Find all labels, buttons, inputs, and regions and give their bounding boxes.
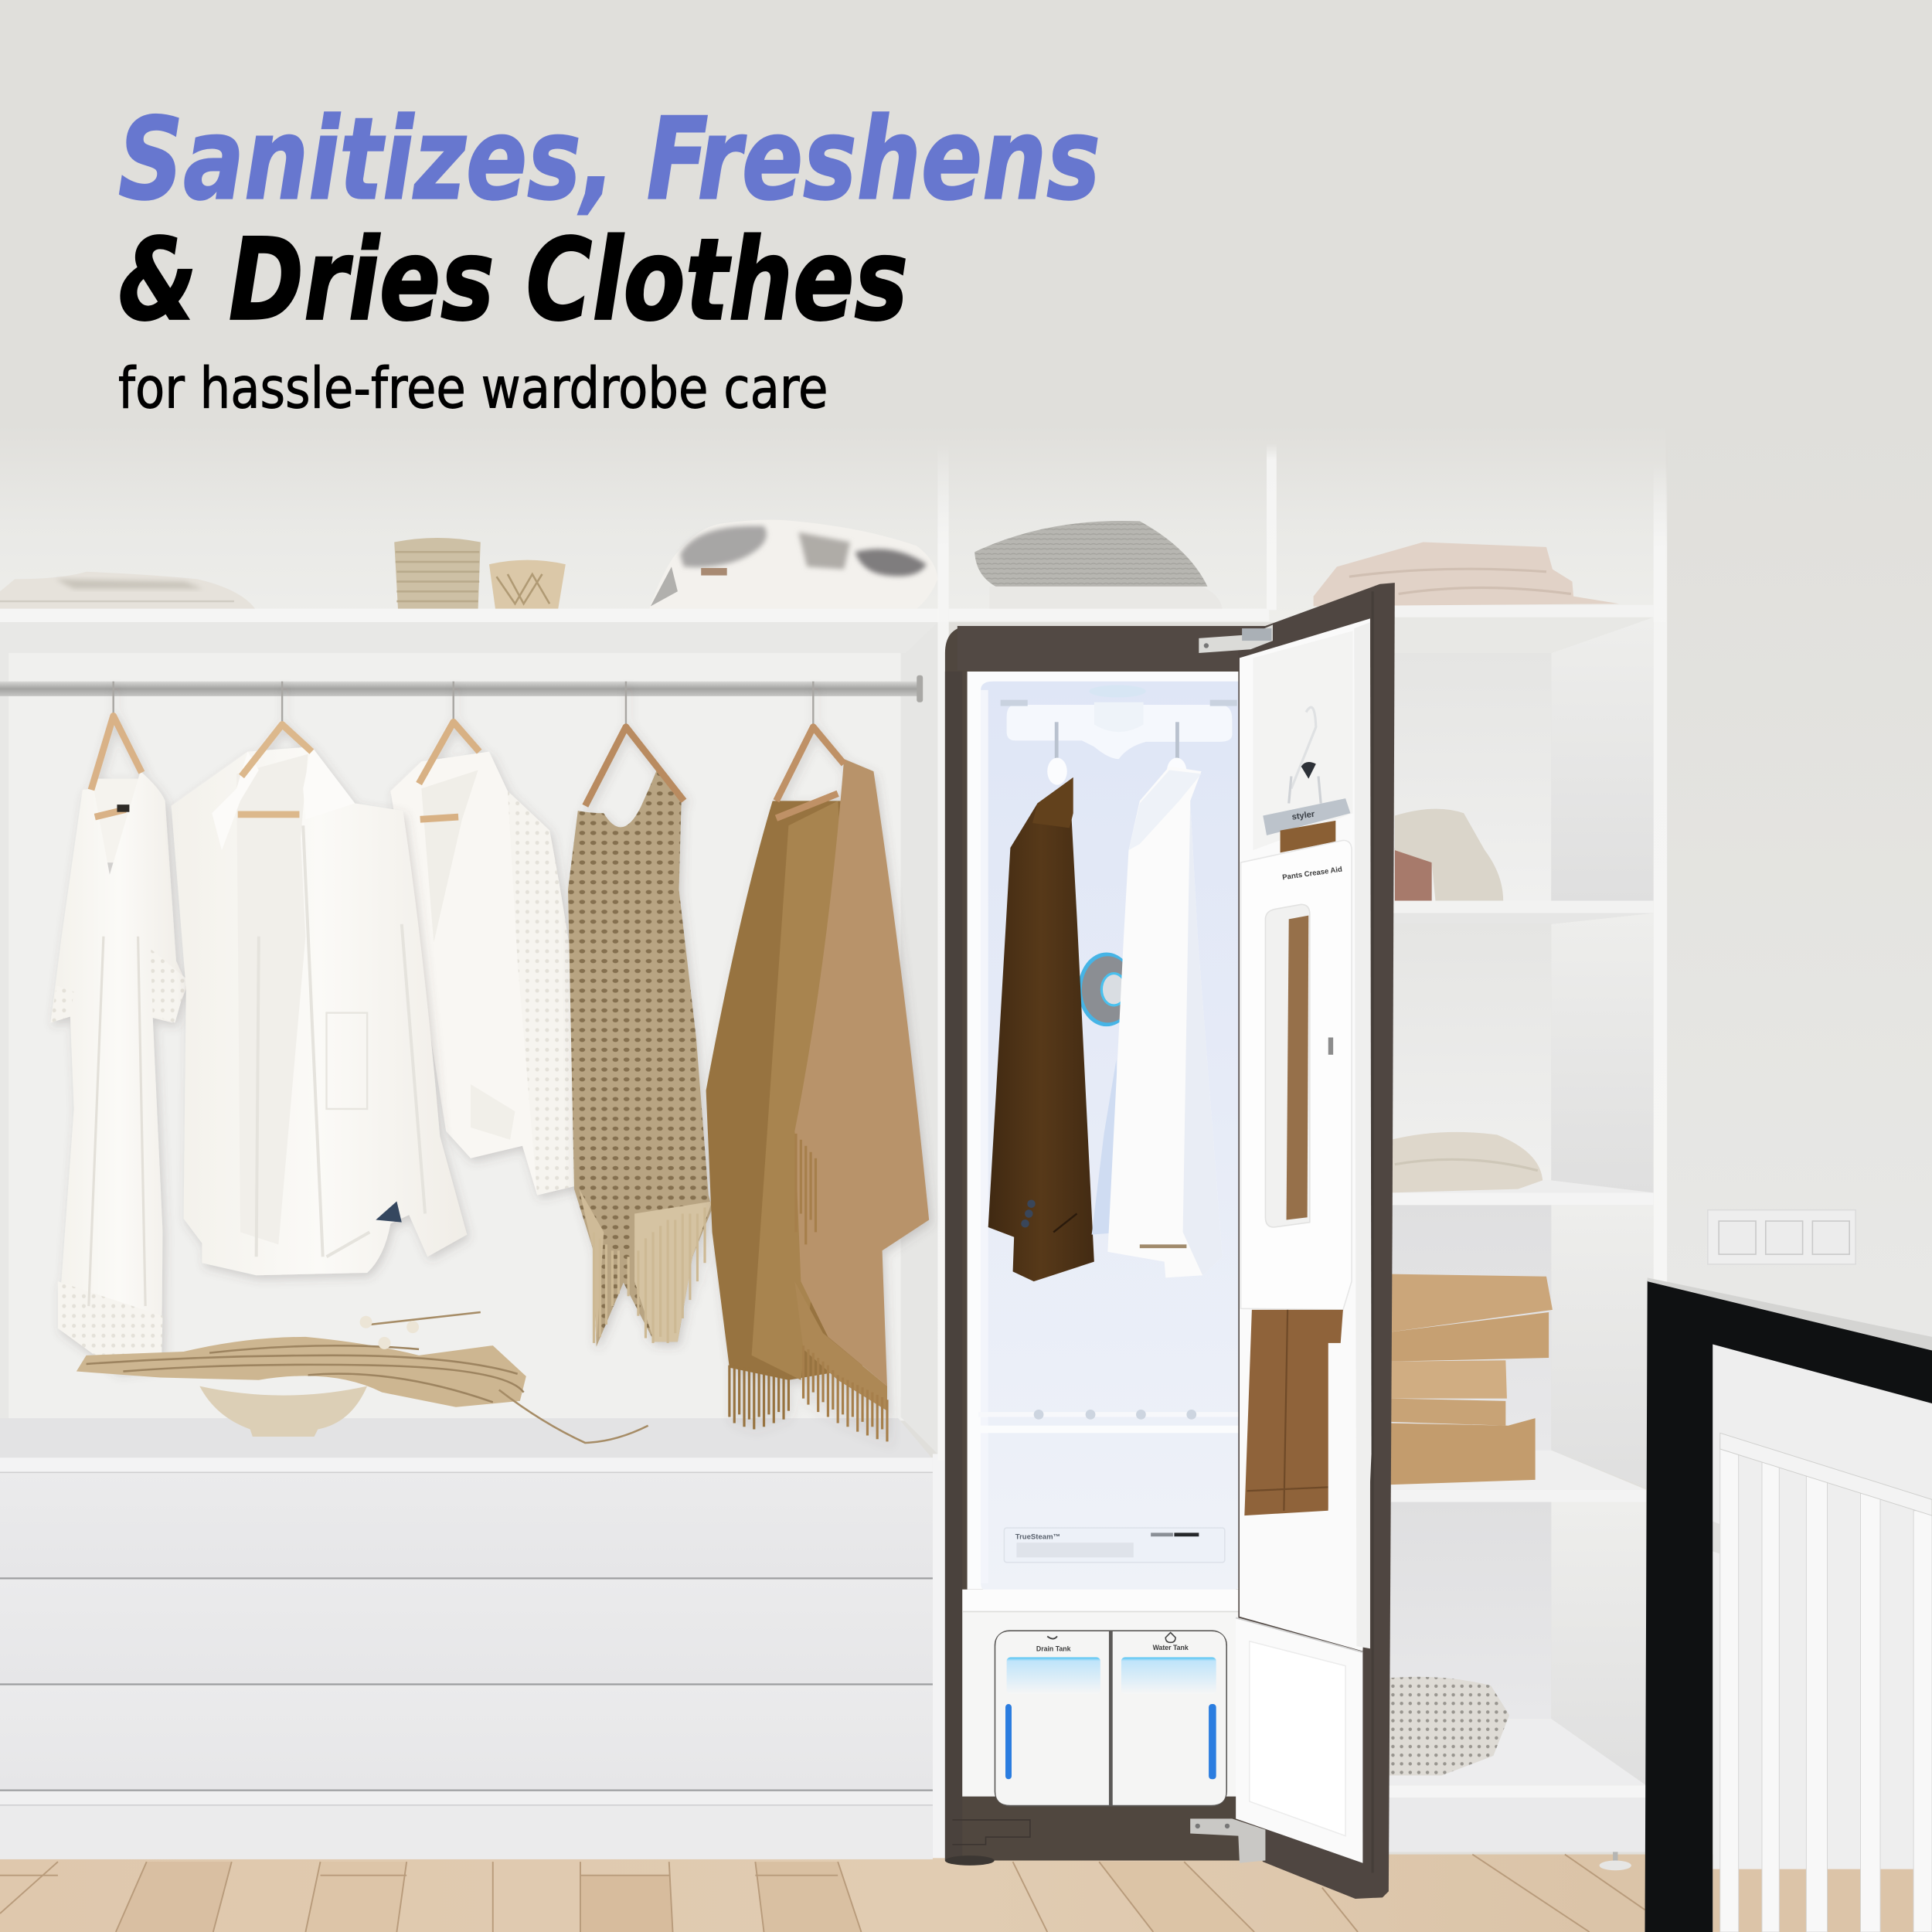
- top hinge: [1199, 624, 1273, 653]
- hanging pants: [1244, 1310, 1343, 1515]
- dried flowers in bowl: [77, 1312, 648, 1443]
- bottom shelf rail: [978, 1410, 1240, 1433]
- left fringe strands: [730, 1366, 788, 1429]
- garment: brown shawl: [706, 682, 929, 1441]
- closet base shelf: [0, 1418, 933, 1472]
- shelf item: cream crochet: [1395, 809, 1503, 900]
- right fringe strands: [804, 1345, 887, 1441]
- steam fan: [1078, 952, 1134, 1026]
- back panels: [1380, 653, 1551, 1719]
- open door shell: [1238, 583, 1395, 1899]
- subheading: for hassle-free wardrobe care: [118, 356, 828, 422]
- title: [118, 94, 1100, 422]
- light front layer: [794, 759, 929, 1386]
- dark back layer: [706, 801, 862, 1380]
- spec label: [1004, 1528, 1225, 1563]
- gray knit stack: [975, 521, 1223, 609]
- garment: white dress: [50, 682, 187, 1372]
- wood floor: [0, 1855, 1932, 1932]
- woven basket: [394, 538, 481, 609]
- cardboard boxes: [1389, 1274, 1553, 1485]
- pants crease panel: [1241, 840, 1352, 1310]
- lower fold: [794, 1281, 887, 1411]
- drain tank: Drain Tank: [1036, 1645, 1071, 1652]
- hanger posts: [1047, 722, 1186, 785]
- top fixture: [1001, 685, 1237, 759]
- bottom hinge: [1190, 1818, 1265, 1863]
- trouser hanger: [1263, 707, 1350, 852]
- garment: crochet top: [568, 682, 713, 1347]
- shelf board: [0, 609, 939, 653]
- spec label: TrueSteam™: [1015, 1532, 1060, 1541]
- shelf item: folded knit: [1391, 1132, 1543, 1192]
- trouser hanger: styler: [1291, 810, 1316, 822]
- appliance: styler: [945, 583, 1395, 1899]
- shelf item: lace blanket: [1387, 1677, 1509, 1776]
- white shirt: [1107, 767, 1223, 1277]
- folded textile left: [0, 572, 255, 609]
- panel: left hanging closet: [0, 609, 939, 1472]
- small basket: [489, 560, 566, 609]
- door upper liner: [1240, 618, 1372, 1651]
- black frame: [1645, 1277, 1932, 1932]
- water tank: [1113, 1631, 1226, 1805]
- heading line 2: & Dries Clothes: [118, 214, 908, 346]
- brown jacket: [988, 777, 1094, 1281]
- cabinet body: [945, 626, 1275, 1861]
- drain tank: [995, 1631, 1109, 1805]
- interior: [962, 672, 1241, 1797]
- light switch plate: [1708, 1210, 1855, 1264]
- shelf boards: [1380, 605, 1654, 1852]
- front edge fringe: [796, 1134, 815, 1244]
- blue shirt underlay: [1092, 1060, 1124, 1235]
- black stair railing: [1645, 1277, 1932, 1932]
- vertical partition: [933, 444, 1277, 1858]
- clothes rail: [0, 675, 923, 702]
- panel: right shelving unit: [1380, 463, 1667, 1870]
- white balusters: [1681, 1433, 1932, 1932]
- railing opening: [1713, 1343, 1932, 1932]
- heading line 1: Sanitizes, Freshens: [118, 94, 1100, 226]
- floral pillow: [649, 520, 937, 609]
- drawers: [0, 1472, 933, 1859]
- garment: white lace blazer: [390, 682, 599, 1196]
- side panels: [1551, 617, 1654, 1785]
- items on top shelf: [0, 520, 1619, 609]
- pink knit: [1314, 543, 1619, 606]
- wooden hanger: [91, 716, 141, 817]
- garment: white shirt: [172, 682, 467, 1275]
- right wall: [1667, 419, 1932, 1932]
- crochet fringe strands: [594, 1207, 705, 1343]
- door lower liner: [1236, 1617, 1362, 1863]
- water tank: Water Tank: [1153, 1644, 1189, 1651]
- drain and water tanks: [995, 1630, 1227, 1806]
- foot: [1600, 1852, 1631, 1870]
- base plinth step: [945, 1820, 1030, 1866]
- pants crease panel: Pants Crease Aid: [1282, 866, 1343, 882]
